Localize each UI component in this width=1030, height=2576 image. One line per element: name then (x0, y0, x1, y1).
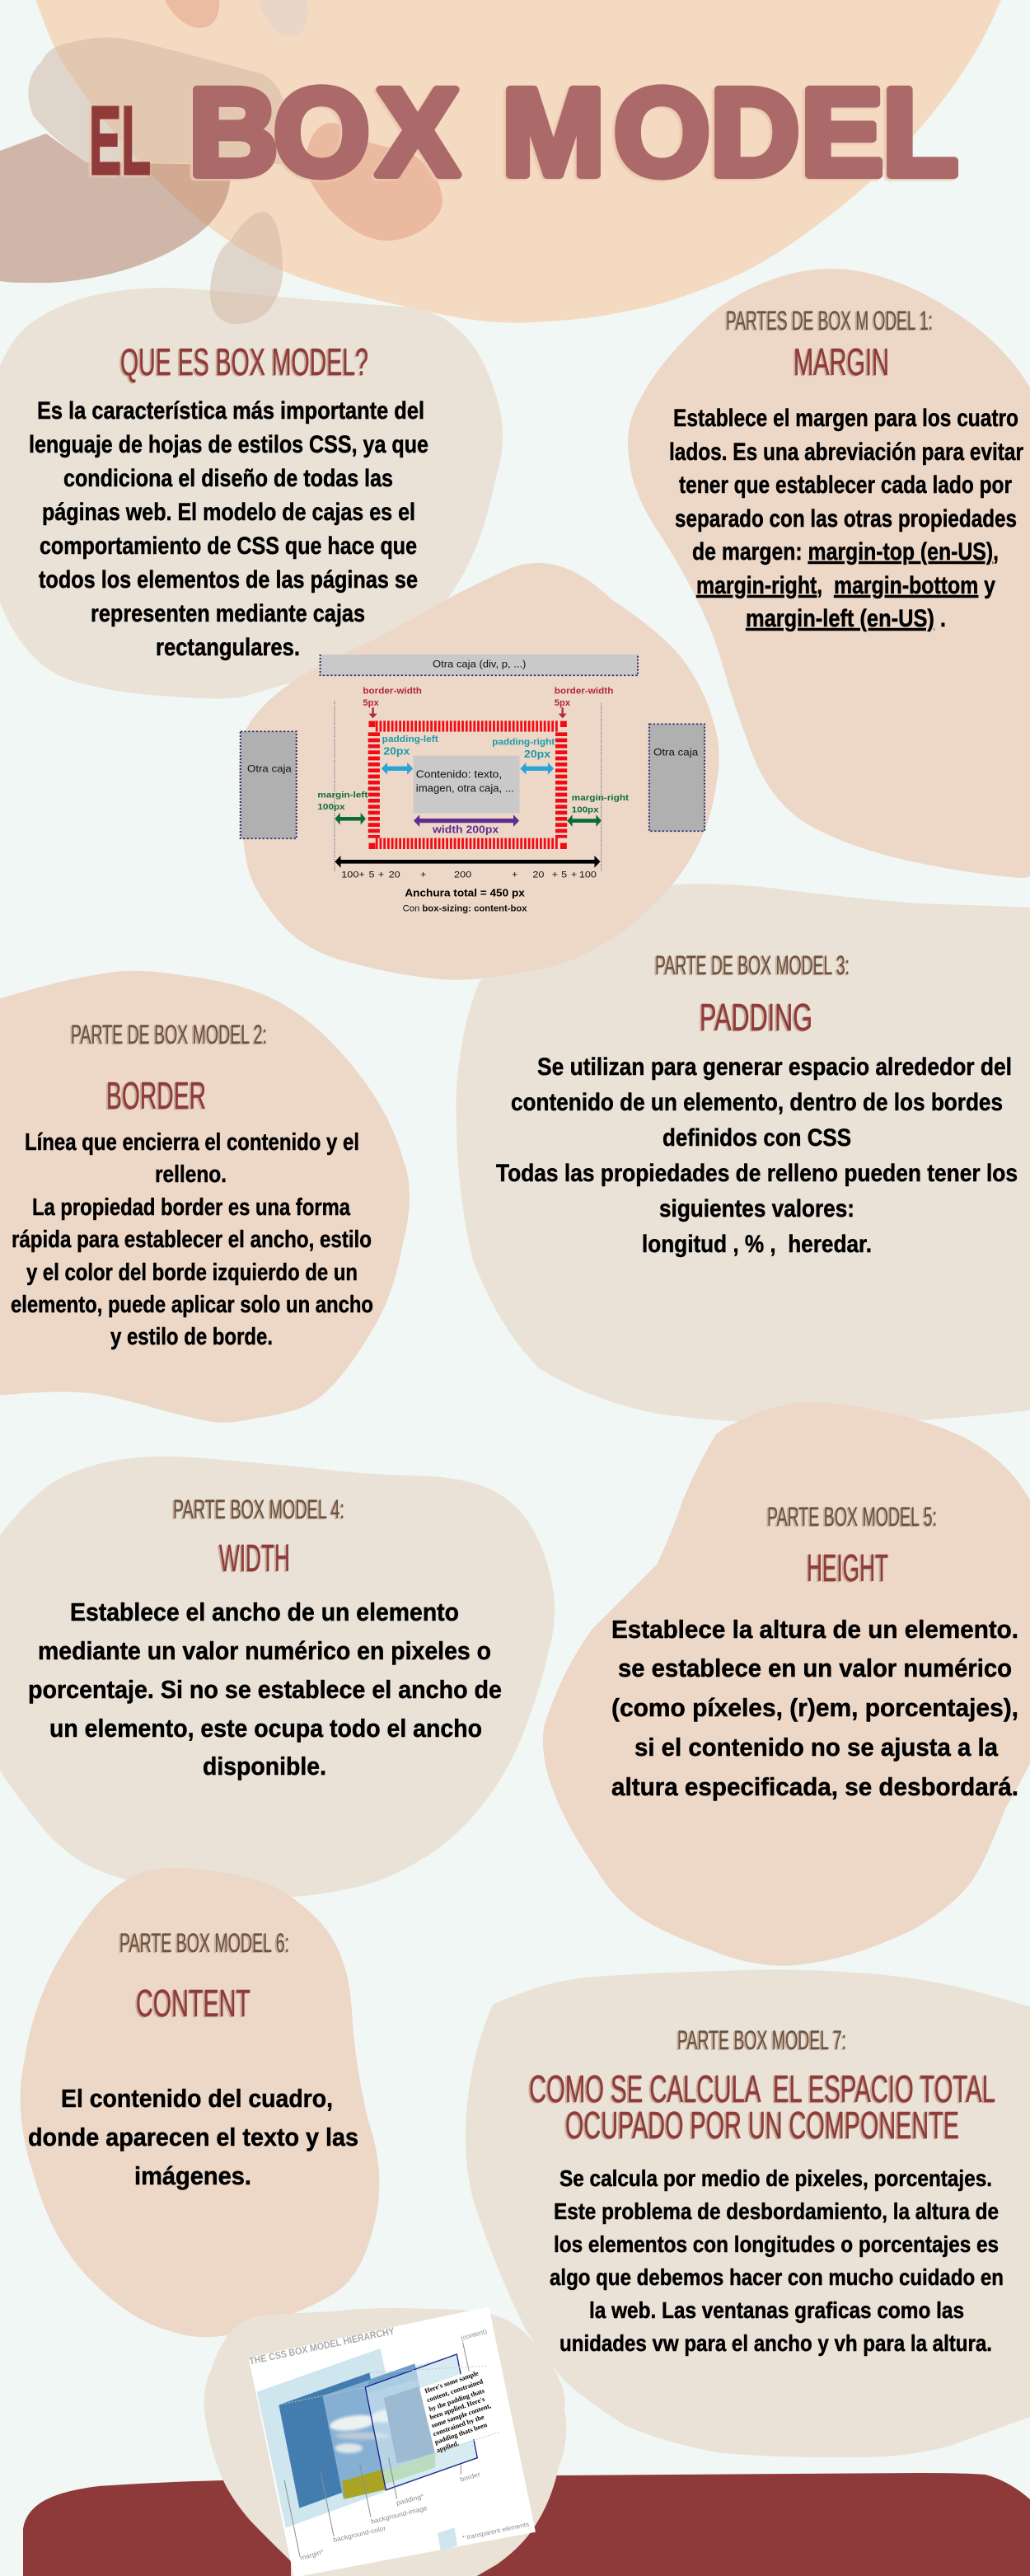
blob (0, 1457, 555, 1898)
body text: relleno. (155, 1161, 227, 1188)
callouts (299, 2327, 530, 2562)
kicker: PARTE BOX MODEL 7: (677, 2025, 846, 2055)
callouts: border (459, 2470, 481, 2484)
body text: imágenes. (134, 2161, 251, 2190)
blob (628, 269, 1030, 878)
body text: Es la característica más importante del (37, 397, 424, 425)
body text: mediante un valor numérico en pixeles o (38, 1636, 491, 1665)
callouts: background-color (332, 2524, 386, 2544)
kicker: PARTE DE BOX MODEL 2: (71, 1020, 267, 1049)
body text: rectangulares. (156, 634, 300, 661)
body text: longitud , % , heredar. (642, 1231, 872, 1258)
sum: 20 (389, 870, 400, 880)
body text: porcentaje. Si no se establece el ancho de (28, 1675, 502, 1704)
padding labels: 20px (524, 748, 550, 760)
title: EL (89, 87, 151, 195)
sample text: Here's some sample (424, 2369, 480, 2395)
body text: y el color del borde izquierdo de un (26, 1260, 358, 1286)
body text: un elemento, este ocupa todo el ancho (49, 1714, 482, 1743)
light blob (28, 37, 284, 164)
panel: border (0, 971, 410, 1423)
picture title: THE CSS BOX MODEL HIERARCHY (248, 2325, 396, 2367)
sum: 100 (341, 870, 359, 880)
sum: 5 (368, 870, 375, 880)
body text: altura especificada, se desbordará. (611, 1772, 1018, 1801)
total width arrow (335, 856, 601, 868)
right box (649, 724, 705, 831)
sum: + (378, 870, 385, 880)
body text: Establece el ancho de un elemento (70, 1598, 459, 1626)
sum: + (571, 870, 578, 880)
panel: como se calcula (466, 1969, 1030, 2457)
padding labels (382, 734, 555, 760)
sample text: some sample content, (430, 2402, 492, 2429)
panel: margin (628, 269, 1030, 878)
body text (28, 2084, 358, 2190)
margin labels and arrows: margin-right (572, 794, 629, 803)
border-width labels: border-width (363, 686, 422, 696)
body text: rápida para establecer el ancho, estilo (12, 1227, 372, 1253)
body text: Línea que encierra el contenido y el (25, 1129, 359, 1156)
body text (28, 1598, 502, 1781)
body text: El contenido del cuadro, (61, 2084, 333, 2113)
small orange blob (163, 0, 219, 28)
heading: BORDER (106, 1074, 206, 1117)
top box (321, 655, 638, 675)
padding labels: padding-right (492, 737, 555, 747)
left box (241, 731, 297, 838)
sum: 200 (454, 870, 472, 880)
panel: content (21, 1868, 379, 2337)
padding labels: padding-left (382, 734, 438, 744)
total: Anchura total = 450 px (405, 886, 525, 899)
sample text: by the padding thats (428, 2386, 486, 2413)
blob (0, 288, 503, 699)
blob (543, 1402, 1030, 1966)
sum: 20 (532, 870, 545, 880)
narrow oval blob (210, 212, 283, 324)
callouts: (content) (460, 2327, 488, 2342)
width arrow: width 200px (432, 823, 499, 835)
callouts: padding* (396, 2493, 424, 2507)
blob (239, 563, 719, 980)
padding labels: 20px (383, 745, 410, 757)
panel: box model diagram (239, 563, 719, 980)
heading: QUE ES BOX MODEL? (120, 340, 368, 383)
blob (456, 884, 1030, 1424)
body text: de margen: margin-top (en-US), (692, 538, 999, 565)
kicker: PARTE BOX MODEL 6: (119, 1928, 289, 1958)
striped border (368, 721, 567, 849)
border-width labels (363, 686, 613, 718)
blob (0, 971, 410, 1423)
sample text: applied. (435, 2439, 460, 2454)
body text: la web. Las ventanas graficas como las (589, 2297, 964, 2323)
body text: condiciona el diseño de todas las (63, 465, 393, 492)
content box: Contenido: texto, (416, 767, 502, 780)
body text (550, 2165, 1004, 2356)
sum: 100 (579, 870, 597, 880)
sum: + (552, 870, 558, 880)
heading: HEIGHT (807, 1546, 888, 1589)
padding arrows (382, 762, 554, 775)
body text: siguientes valores: (659, 1195, 854, 1222)
orange blob (306, 123, 442, 241)
kicker: PARTE BOX MODEL 4: (173, 1494, 344, 1524)
body text (29, 397, 428, 661)
sample text (424, 2369, 492, 2454)
body text: donde aparecen el texto y las (28, 2123, 358, 2151)
panel: css box model hierarchy image (204, 2306, 566, 2576)
diagram (241, 655, 705, 913)
body text: lenguaje de hojas de estilos CSS, ya que (29, 431, 428, 458)
body text: Establece la altura de un elemento. (611, 1615, 1018, 1644)
body text: elemento, puede aplicar solo un ancho (11, 1292, 373, 1318)
sample text: padding thats been (433, 2421, 489, 2446)
body text: todos los elementos de las páginas se (39, 566, 418, 594)
sample text: been applied. Here's (428, 2395, 486, 2421)
body text: disponible. (203, 1752, 326, 1781)
sum: + (512, 870, 518, 880)
content box: imagen, otra caja, ... (416, 782, 514, 794)
callouts: background-image (370, 2504, 428, 2526)
body text (11, 1129, 373, 1350)
content box (414, 756, 520, 814)
sample text: content, constrained (426, 2377, 485, 2404)
blob (204, 2308, 566, 2576)
margin labels and arrows: margin-left (317, 791, 368, 800)
title words: box model: BOXMODEL (189, 63, 958, 201)
body text: margin-left (en-US) . (746, 605, 946, 632)
border-width labels: 5px (555, 697, 570, 708)
blob (21, 1868, 379, 2337)
margin labels and arrows (317, 791, 629, 827)
body text: páginas web. El modelo de cajas es el (42, 499, 415, 526)
body text: definidos con CSS (662, 1124, 851, 1152)
body text (496, 1053, 1018, 1258)
body text: (como píxeles, (r)em, porcentajes), (611, 1693, 1018, 1722)
border-width labels: 5px (363, 697, 379, 708)
right box: Otra caja (653, 747, 699, 758)
sum: + (420, 870, 427, 880)
panel: height (543, 1402, 1030, 1966)
sample text: constrained by the (432, 2413, 485, 2438)
header blobs (0, 0, 1009, 323)
title (89, 63, 958, 201)
body text: si el contenido no se ajusta a la (634, 1733, 999, 1762)
body text: La propiedad border es una forma (32, 1194, 351, 1221)
body text (611, 1615, 1018, 1801)
picture (248, 2306, 536, 2576)
blob (466, 1969, 1030, 2457)
sum: 5 (561, 870, 568, 880)
top box: Otra caja (div, p, ...) (433, 658, 526, 669)
small grey blob (256, 0, 308, 36)
body text: margin-right, margin-bottom y (696, 572, 995, 599)
heading (529, 2067, 995, 2147)
top peach blob (30, 0, 1009, 323)
body text (669, 405, 1023, 632)
kicker: PARTE DE BOX MODEL 3: (655, 950, 850, 980)
body text: se establece en un valor numérico (618, 1654, 1012, 1682)
body text: comportamiento de CSS que hace que (40, 533, 417, 560)
brown blob (0, 134, 231, 283)
panel: padding (456, 884, 1030, 1424)
box-sizing note: Con box-sizing: content-box (403, 903, 527, 913)
heading: PADDING (700, 996, 812, 1039)
body text: representen mediante cajas (91, 600, 365, 627)
callouts: * transparent elements (461, 2521, 530, 2542)
heading: MARGIN (794, 340, 889, 383)
width arrow (414, 814, 519, 835)
border-width labels: border-width (555, 686, 613, 696)
footer band (23, 2473, 1030, 2576)
left box: Otra caja (247, 763, 292, 774)
callouts: margin* (299, 2548, 325, 2562)
heading: CONTENT (136, 1982, 250, 2025)
panel: width (0, 1457, 555, 1898)
margin labels and arrows: 100px (317, 803, 346, 812)
heading: WIDTH (219, 1537, 290, 1579)
sum: + (358, 870, 365, 880)
panel: que es box model (0, 288, 503, 699)
body text: y estilo de borde. (110, 1324, 273, 1350)
margin labels and arrows: 100px (572, 805, 600, 814)
